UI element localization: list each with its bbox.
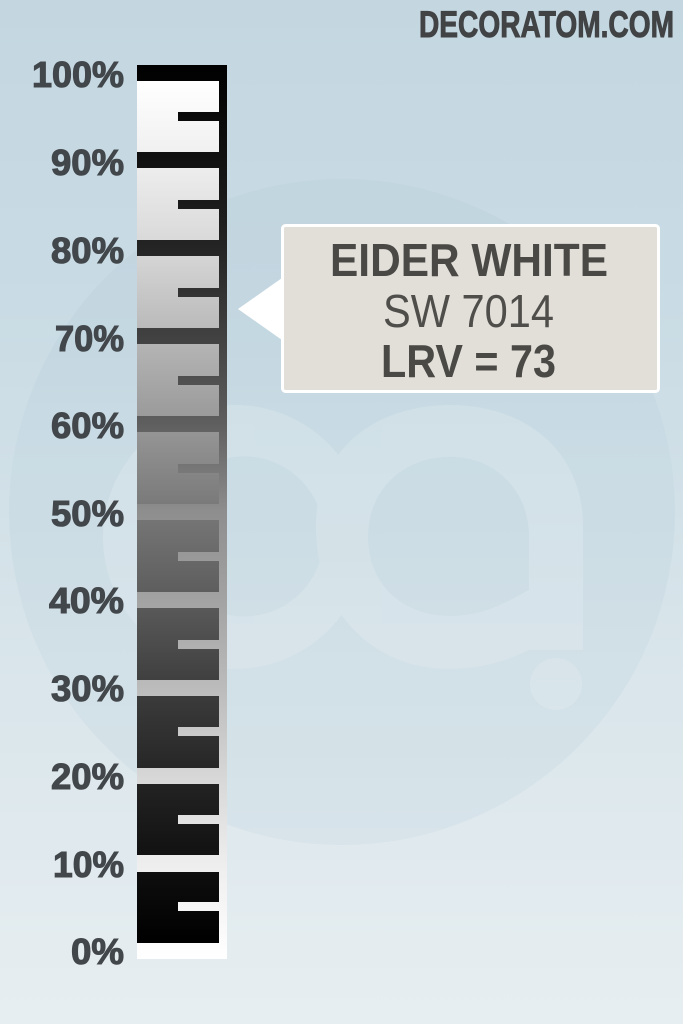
LRV value: LRV = 73 xyxy=(381,335,556,387)
axis labels: 90% xyxy=(51,142,124,183)
colour code: SW 7014 xyxy=(383,285,554,337)
watermark logo xyxy=(9,179,675,845)
callout: paint colour xyxy=(238,226,658,392)
axis labels: 70% xyxy=(55,318,124,359)
axis labels: 30% xyxy=(51,668,124,709)
axis labels: 40% xyxy=(49,580,124,621)
callout pointer xyxy=(238,278,282,340)
LRV gradient scale xyxy=(137,65,227,959)
axis labels: 10% xyxy=(53,844,124,885)
axis labels: 100% xyxy=(32,54,124,95)
axis labels: 60% xyxy=(51,405,124,446)
axis labels xyxy=(32,54,124,972)
axis labels: 20% xyxy=(51,756,124,797)
callout box xyxy=(282,226,658,392)
axis labels: 50% xyxy=(51,493,124,534)
axis labels: 80% xyxy=(51,230,124,271)
colour name: EIDER WHITE xyxy=(330,234,608,286)
axis labels: 0% xyxy=(71,931,124,972)
